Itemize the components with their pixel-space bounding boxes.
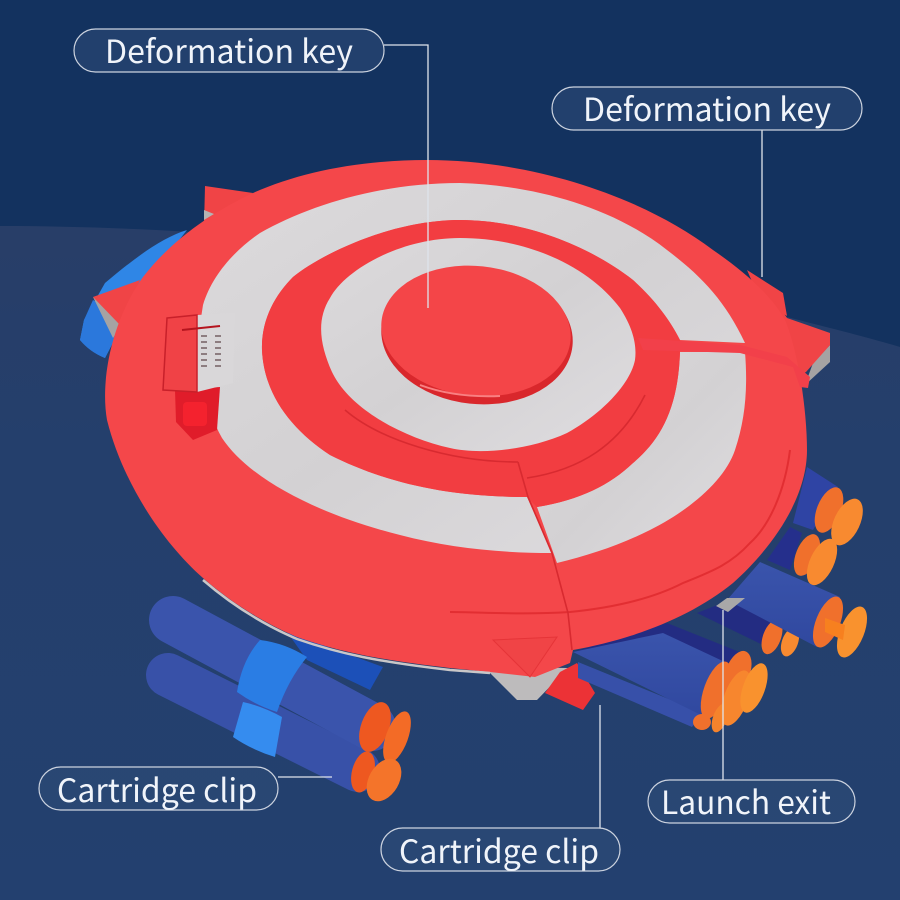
icon: left side blue handle <box>80 230 187 358</box>
label: launch exit: Launch exit <box>661 778 831 824</box>
outer silver ring, right piece <box>537 352 746 563</box>
label: cartridge clip centre: Cartridge clip <box>399 827 599 873</box>
label: deformation key left: Deformation key <box>105 27 353 73</box>
label: deformation key right: Deformation key <box>583 85 831 131</box>
middle ring step and seam lines <box>345 395 645 650</box>
rim line <box>450 450 790 613</box>
panel: shield <box>93 160 830 677</box>
icon: right dart group <box>697 562 873 662</box>
centre disc <box>374 256 580 414</box>
outer silver ring, main piece <box>200 183 745 553</box>
icon: plaque and latch <box>163 313 235 440</box>
bottom tab <box>493 637 557 677</box>
icon: lower centre dart group <box>573 623 773 734</box>
band across shield <box>638 338 810 388</box>
icon: lower left dart group <box>168 620 417 807</box>
shield outer red body <box>105 160 807 677</box>
middle red ring <box>262 220 680 507</box>
inner silver ring <box>321 238 635 451</box>
leader lines <box>278 45 762 828</box>
shield corner tabs <box>93 186 830 385</box>
label: cartridge clip left: Cartridge clip <box>57 766 257 812</box>
icon: grey hinge and red clip <box>450 598 745 710</box>
icon: upper right darts <box>767 467 869 590</box>
bottom grey edge <box>203 580 490 673</box>
